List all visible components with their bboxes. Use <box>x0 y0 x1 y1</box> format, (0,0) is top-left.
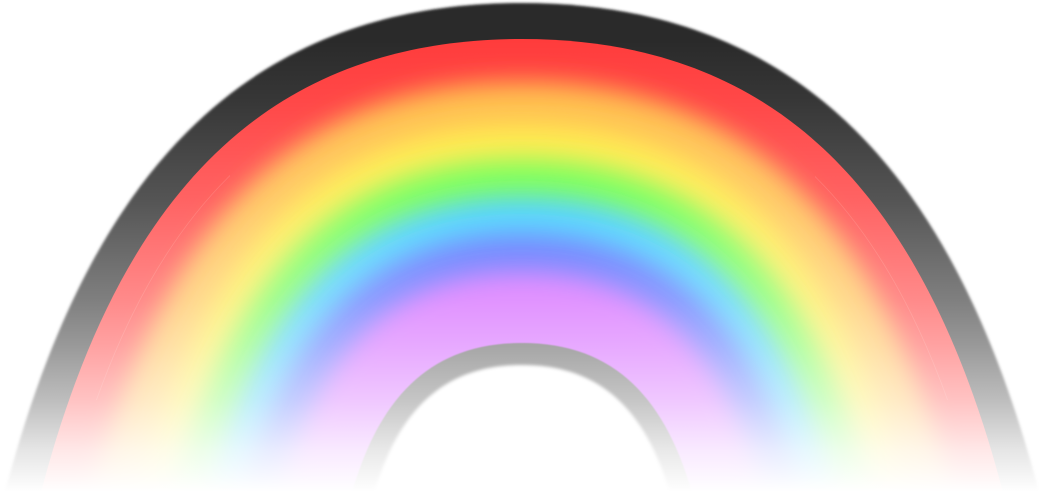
band: violet <box>292 256 752 472</box>
inner grey arc <box>350 343 694 500</box>
inner white opening <box>372 365 672 500</box>
band: cyan <box>206 197 838 500</box>
band: yellow <box>168 114 877 428</box>
band: orange <box>91 82 953 500</box>
band: blue <box>258 220 787 464</box>
faint highlight line <box>96 175 948 400</box>
band: green <box>170 160 874 500</box>
